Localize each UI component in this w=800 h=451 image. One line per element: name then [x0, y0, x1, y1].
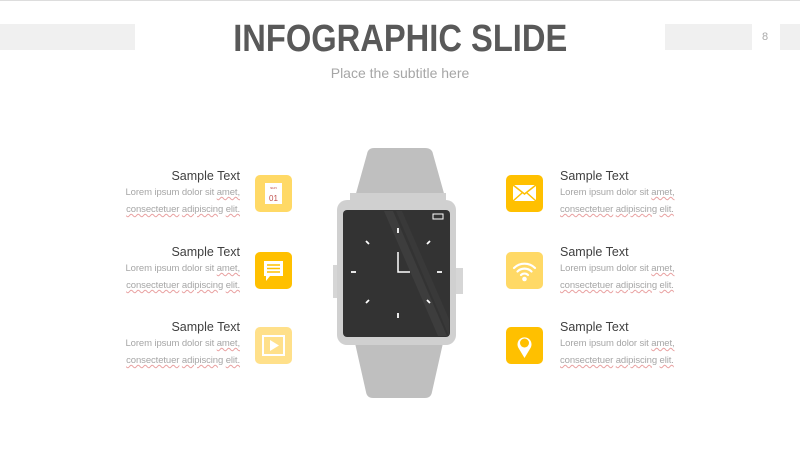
text block left 1: Lorem ipsum dolor sit amet,: [125, 187, 240, 198]
icon: chat: [255, 252, 292, 289]
page number: 8: [762, 31, 768, 43]
text block left 1: [125, 169, 240, 218]
text block left 2: [125, 245, 240, 294]
text block right 1: Lorem ipsum dolor sit amet,: [560, 187, 675, 198]
text block left 1: consectetuer adipiscing elit.: [126, 204, 240, 215]
text block right 3: consectetuer adipiscing elit.: [560, 355, 674, 366]
text block right 1: [560, 169, 675, 218]
text block right 2: [560, 245, 675, 294]
title: INFOGRAPHIC SLIDE: [233, 18, 567, 60]
text block left 2: consectetuer adipiscing elit.: [126, 280, 240, 291]
text block left 3: [125, 320, 240, 368]
icon: mail: [506, 175, 543, 212]
text block left 2: Sample Text: [171, 245, 240, 259]
icon: pin: [506, 327, 543, 364]
text block left 2: Lorem ipsum dolor sit amet,: [125, 263, 240, 274]
icon: calendar: sun: [270, 185, 277, 190]
text block right 2: Lorem ipsum dolor sit amet,: [560, 263, 675, 274]
text block right 2: consectetuer adipiscing elit.: [560, 280, 674, 291]
text block right 3: [560, 320, 675, 368]
text block right 1: Sample Text: [560, 169, 629, 183]
text block right 3: Sample Text: [560, 320, 629, 334]
smartwatch: [333, 148, 463, 398]
icon: video: [255, 327, 292, 364]
text block left 3: Sample Text: [171, 320, 240, 334]
text block right 3: Lorem ipsum dolor sit amet,: [560, 338, 675, 349]
text block left 1: Sample Text: [171, 169, 240, 183]
text block right 2: Sample Text: [560, 245, 629, 259]
icon: wifi: [506, 252, 543, 289]
text block left 3: consectetuer adipiscing elit.: [126, 355, 240, 366]
text block left 3: Lorem ipsum dolor sit amet,: [125, 338, 240, 349]
icon: calendar: [255, 175, 292, 212]
icon: calendar: 01: [269, 194, 278, 203]
text block right 1: consectetuer adipiscing elit.: [560, 204, 674, 215]
subtitle: Place the subtitle here: [331, 65, 469, 81]
